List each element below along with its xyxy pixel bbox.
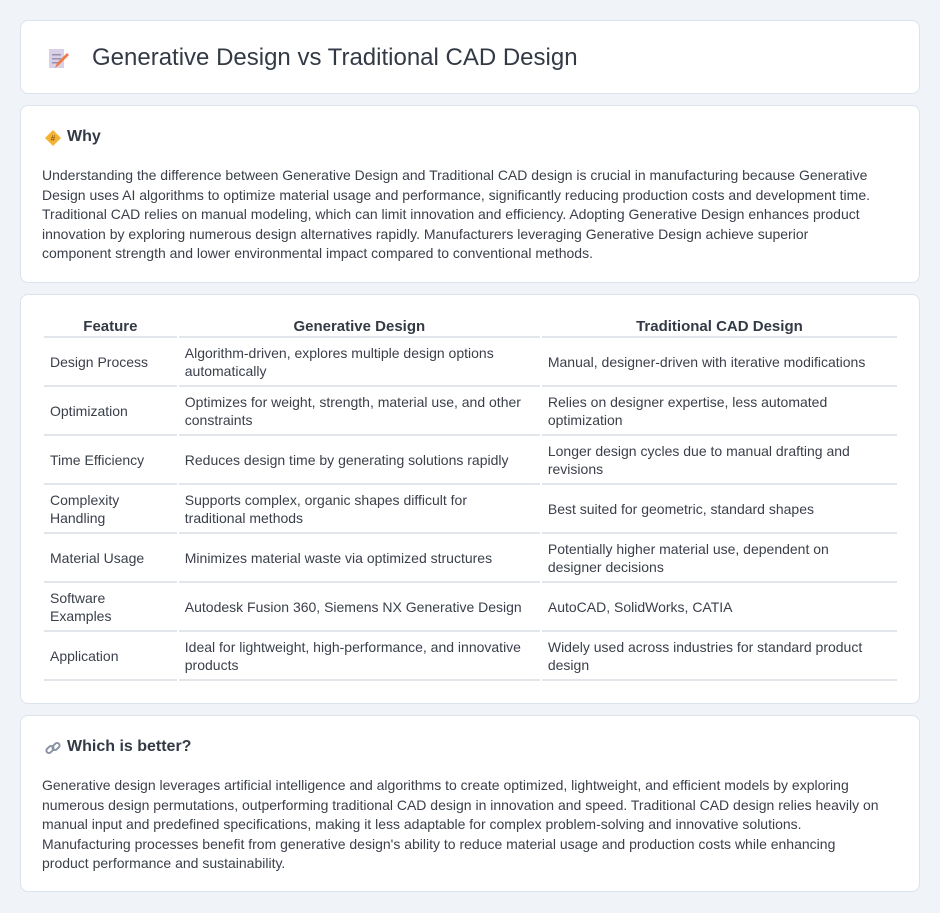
panel: comparison table [20,294,920,704]
icon: diamond: # [51,134,56,143]
table: Time Efficiency [50,452,144,468]
table: Potentially higher material use, dependent on designer decisions [548,540,829,574]
table: Software Examples [50,590,111,624]
icon: link [45,742,60,754]
table: Best suited for geometric, standard shapes [548,500,814,516]
icon: diamond [45,130,61,146]
table: AutoCAD, SolidWorks, CATIA [548,598,733,614]
panel: which is better [20,715,920,892]
table: Optimization [50,402,128,418]
heading: why: Why [67,128,101,145]
table [44,318,897,681]
text: why: Understanding the difference between Generative Design and Traditional CAD design is crucial in manufacturing because Generative Design uses AI algorithms to optimize material usage and performance, significantly reducing production costs and development time. Traditional CAD relies on manual modeling, which can limit innovation and efficiency. Adopting Generative Design enhances product innovation by exploring numerous design alternatives rapidly. Manufacturers leveraging Generative Design achieve superior component strength and lower environmental impact compared to conventional methods. [42,167,870,261]
table: Relies on designer expertise, less automated optimization [548,394,827,428]
table: Optimizes for weight, strength, material use, and other constraints [185,394,521,428]
table: Minimizes material waste via optimized structures [185,550,492,566]
table: Supports complex, organic shapes difficult for traditional methods [185,492,467,526]
table: Generative Design [293,318,425,334]
text: which is better: Generative design leverages artificial intelligence and algorithms to create optimized, lightweight, and efficient models by exploring numerous design permutations, outperforming traditional CAD design in innovation and speed. Traditional CAD design relies heavily on manual input and predefined specifications, making it less adaptable for complex problem-solving and innovative solutions. Manufacturing processes benefit from generative design's ability to reduce material usage and production costs while enhancing product performance and sustainability. [42,777,879,871]
table: Traditional CAD Design [636,318,803,334]
table: Ideal for lightweight, high-performance, and innovative products [185,638,521,672]
table: Feature [83,318,137,334]
table: Design Process [50,354,148,370]
table: Algorithm-driven, explores multiple design options automatically [185,344,494,378]
table: Widely used across industries for standard product design [548,638,862,672]
table: Longer design cycles due to manual drafting and revisions [548,442,850,476]
title: Generative Design vs Traditional CAD Design [92,44,578,71]
table: Complexity Handling [50,492,119,526]
table: Manual, designer-driven with iterative modifications [548,354,865,370]
heading: which is better: Which is better? [67,738,191,755]
panel: why [20,105,920,283]
table: Autodesk Fusion 360, Siemens NX Generative Design [185,598,522,614]
header card [20,20,920,94]
table: Application [50,648,118,664]
table: Reduces design time by generating solutions rapidly [185,452,509,468]
table: Material Usage [50,550,144,566]
icon: document pencil [49,49,69,68]
